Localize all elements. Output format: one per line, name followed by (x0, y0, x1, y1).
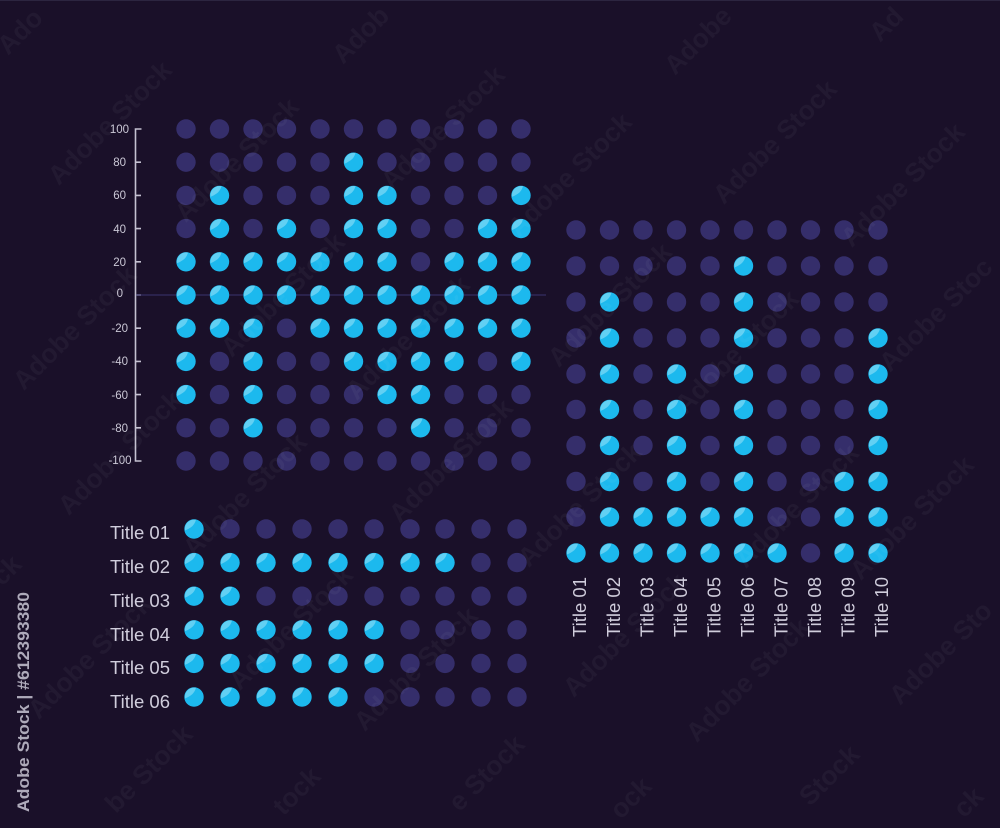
column labels: Title 04 (670, 577, 691, 637)
column labels: Title 08 (804, 577, 825, 637)
watermarks: Adobe Stock (542, 237, 678, 373)
dot grid: chart 3 (566, 220, 888, 563)
watermarks: tock (266, 761, 326, 821)
y axis with ticks and zero line: -40 (111, 356, 128, 368)
watermarks: Adobe Stock (502, 107, 638, 243)
row labels: Title 02 (110, 556, 170, 577)
watermarks: Adobe Stock (844, 450, 980, 586)
watermarks: Adobe Stock (169, 92, 305, 228)
y axis with ticks and zero line: 60 (113, 190, 126, 202)
watermarks: Adobe Stock (52, 385, 188, 521)
watermarks: e Stock (442, 729, 530, 817)
watermarks: Adob (326, 0, 395, 69)
watermarks: Adobe Stock (680, 612, 816, 748)
column labels: Title 06 (737, 577, 758, 637)
row labels: Title 03 (110, 590, 170, 611)
row labels: Title 01 (110, 522, 170, 543)
stock id vertical text: Adobe Stock | #612393380 (14, 592, 33, 812)
dot grid: chart 1 (176, 119, 531, 471)
y axis with ticks and zero line: 0 (117, 288, 123, 300)
watermarks: ock (604, 771, 657, 825)
watermarks: Adobe Stock (223, 560, 359, 696)
column labels: Title 10 (871, 577, 892, 637)
y axis with ticks and zero line: 40 (113, 224, 126, 236)
column labels: Title 03 (636, 577, 658, 637)
y axis with ticks and zero line: -80 (111, 423, 128, 435)
column labels (569, 577, 892, 637)
watermarks: Adobe Stock (669, 284, 805, 420)
watermarks: Adobe Stock (557, 567, 693, 703)
watermarks: Adobe Stock (383, 393, 519, 529)
watermarks: Ad (863, 1, 909, 47)
row labels: Title 06 (110, 691, 170, 712)
y axis with ticks and zero line: 100 (110, 124, 129, 136)
watermarks: Stock (793, 739, 865, 811)
row labels (110, 522, 170, 712)
dot grid: chart 2 (184, 519, 527, 707)
watermarks: ck (947, 781, 989, 823)
column labels: Title 02 (603, 577, 624, 637)
column labels: Title 01 (569, 577, 590, 637)
row labels: Title 05 (110, 657, 170, 678)
y axis with ticks and zero line (108, 124, 546, 467)
y axis with ticks and zero line: -20 (111, 323, 128, 335)
y axis with ticks and zero line: 20 (113, 257, 126, 269)
watermarks: Adobe Stock (707, 74, 843, 210)
watermarks: Adobe Stock (42, 55, 178, 191)
watermarks: Adobe Stock (340, 270, 476, 406)
watermarks: Adobe Stock (7, 260, 143, 396)
row labels: Title 04 (110, 624, 170, 645)
y axis with ticks and zero line: -100 (108, 455, 132, 467)
watermarks: Adobe Stock (215, 227, 351, 363)
dot chart: vertical columns (566, 220, 892, 637)
watermarks: Adobe Stock (512, 437, 648, 573)
watermarks: Adobe Stock (22, 589, 158, 725)
y axis with ticks and zero line: 80 (113, 157, 126, 169)
dot chart: vertical diverging scale (108, 119, 546, 471)
watermarks: Adobe Stock (348, 601, 484, 737)
watermarks: Adobe Stock (835, 117, 971, 253)
watermarks: be Stock (99, 719, 198, 818)
column labels: Title 05 (704, 577, 724, 637)
watermarks: Adobe Stock (375, 60, 511, 196)
watermarks: Adobe Stock (729, 438, 865, 574)
column labels: Title 07 (770, 577, 792, 637)
column labels: Title 09 (838, 577, 858, 637)
watermarks: Adobe Stock (177, 427, 313, 563)
y axis with ticks and zero line: -60 (111, 390, 128, 402)
watermarks: Adobe Stoc (873, 252, 998, 377)
dot chart: horizontal rows (110, 519, 527, 712)
watermarks: Adobe Sto (883, 595, 998, 710)
watermarks: Adobe (658, 1, 738, 80)
